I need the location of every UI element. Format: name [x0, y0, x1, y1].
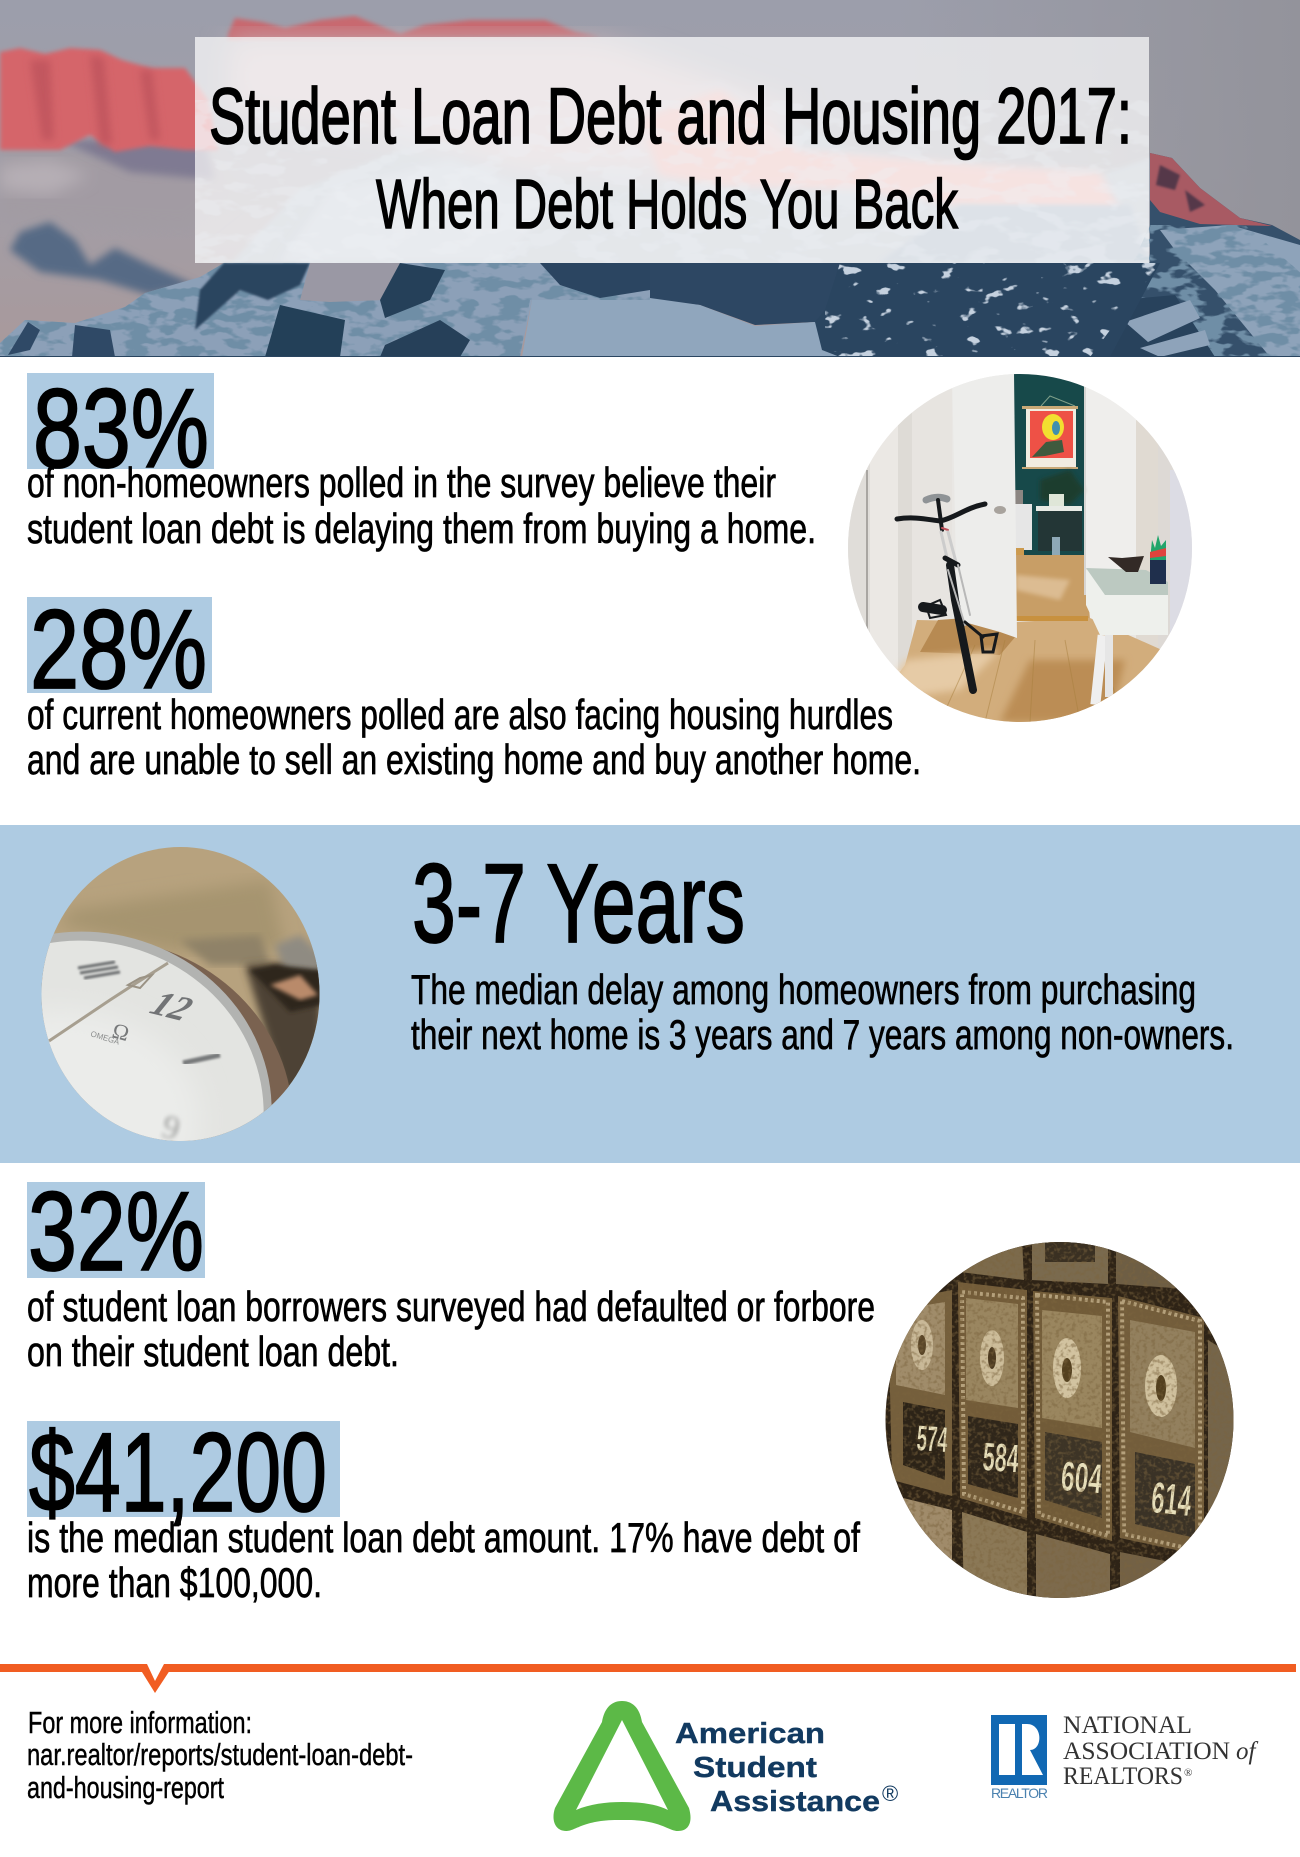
door 614: 614 — [1149, 1473, 1194, 1526]
watch markings — [78, 962, 203, 1148]
footer: more information: For more information: — [28, 1705, 252, 1740]
footer: more information: and-housing-report — [27, 1770, 224, 1805]
photo: pocket watch — [42, 847, 320, 1141]
text: borrowers: on their student loan debt. — [27, 1328, 399, 1375]
stat: 32% highlight — [27, 1182, 205, 1278]
text: median debt: more than $100,000. — [27, 1559, 322, 1606]
text: borrowers: of student loan borrowers surveyed had defaulted or forbore — [27, 1283, 875, 1330]
left mountain slopes — [0, 263, 650, 357]
footer: more information — [27, 1705, 413, 1805]
hero banner: mountain photo — [0, 0, 1300, 357]
text: median debt — [27, 1514, 860, 1606]
text: non-homeowners: of non-homeowners polled in the survey believe their — [27, 459, 776, 506]
text: non-homeowners — [27, 459, 816, 552]
side table — [1086, 535, 1168, 705]
text: median debt: is the median student loan debt amount. 17% have debt of — [27, 1514, 860, 1561]
door 584: 584 — [981, 1435, 1021, 1482]
logo: American Student Assistance: ® — [882, 1781, 898, 1806]
watch markings: OMEGA — [89, 1029, 121, 1047]
stat: 83% highlight — [27, 373, 214, 469]
text: current homeowners: and are unable to sell an existing home and buy another home. — [27, 736, 921, 783]
footer: more information: nar.realtor/reports/student-loan-debt- — [27, 1737, 413, 1772]
door 604: 604 — [1059, 1452, 1105, 1503]
green room — [1014, 365, 1084, 565]
text: non-homeowners: student loan debt is delaying them from buying a home. — [27, 505, 816, 552]
clouds — [0, 150, 240, 230]
door 574: 574 — [915, 1417, 949, 1460]
stat: $41,200 highlight — [27, 1421, 340, 1517]
top row — [962, 1246, 1024, 1280]
logo: American Student Assistance: American — [675, 1718, 825, 1750]
heading: 3-7 Years: 3-7 Years — [412, 841, 745, 966]
stat: 28% number: 28% — [30, 587, 207, 712]
logo: National Association of Realtors: ASSOCIATION — [1063, 1738, 1230, 1765]
stat: $41,200 number: $41,200 — [29, 1410, 327, 1535]
subtitle: When Debt Holds You Back — [376, 165, 959, 243]
peak behind panel — [1144, 158, 1150, 263]
logo: American Student Assistance — [553, 1701, 898, 1831]
logo: National Association of Realtors — [991, 1712, 1258, 1801]
stat: 32% number: 32% — [28, 1169, 204, 1294]
logo: National Association of Realtors: REALTORS — [1063, 1763, 1183, 1790]
bicycle — [897, 497, 997, 690]
watch markings: Ω — [110, 1018, 132, 1046]
floor — [1016, 555, 1090, 620]
watch markings: 12 — [140, 985, 203, 1028]
logo: American Student Assistance: Assistance — [710, 1786, 880, 1818]
stat: 83% number: 83% — [33, 366, 209, 491]
photo: hallway with bicycle — [840, 365, 1200, 730]
title panel — [195, 37, 1149, 263]
logo: National Association of Realtors: NATIONAL — [1063, 1712, 1192, 1739]
text: median delay — [411, 966, 1234, 1058]
watch markings: 9 — [158, 1108, 184, 1148]
photo: brass mailboxes — [880, 1238, 1240, 1604]
door — [964, 374, 1017, 638]
right ridge with red light — [1110, 153, 1300, 356]
footer rule with chevron — [0, 1664, 1296, 1693]
text: current homeowners: of current homeowners polled are also facing housing hurdles — [27, 691, 893, 738]
navy rock face — [800, 263, 1160, 357]
icon: green triangle — [553, 1701, 691, 1831]
door 584 — [958, 1282, 1027, 1518]
logo: National Association of Realtors: of — [1236, 1738, 1258, 1765]
poster — [1022, 396, 1078, 469]
door 604 — [1033, 1291, 1112, 1541]
door 574 — [888, 1290, 952, 1496]
text: current homeowners — [27, 691, 921, 783]
bottom row — [903, 1498, 952, 1560]
logo: National Association of Realtors: ® — [1184, 1767, 1192, 1779]
logo: American Student Assistance: Student — [693, 1752, 817, 1784]
text: borrowers — [27, 1283, 875, 1375]
copper bezel — [42, 945, 289, 1141]
band: 3-7 years — [0, 825, 1300, 1163]
logo: National Association of Realtors: REALTOR — [991, 1785, 1048, 1801]
door 614 — [1118, 1296, 1204, 1556]
stat: 28% highlight — [27, 597, 212, 693]
